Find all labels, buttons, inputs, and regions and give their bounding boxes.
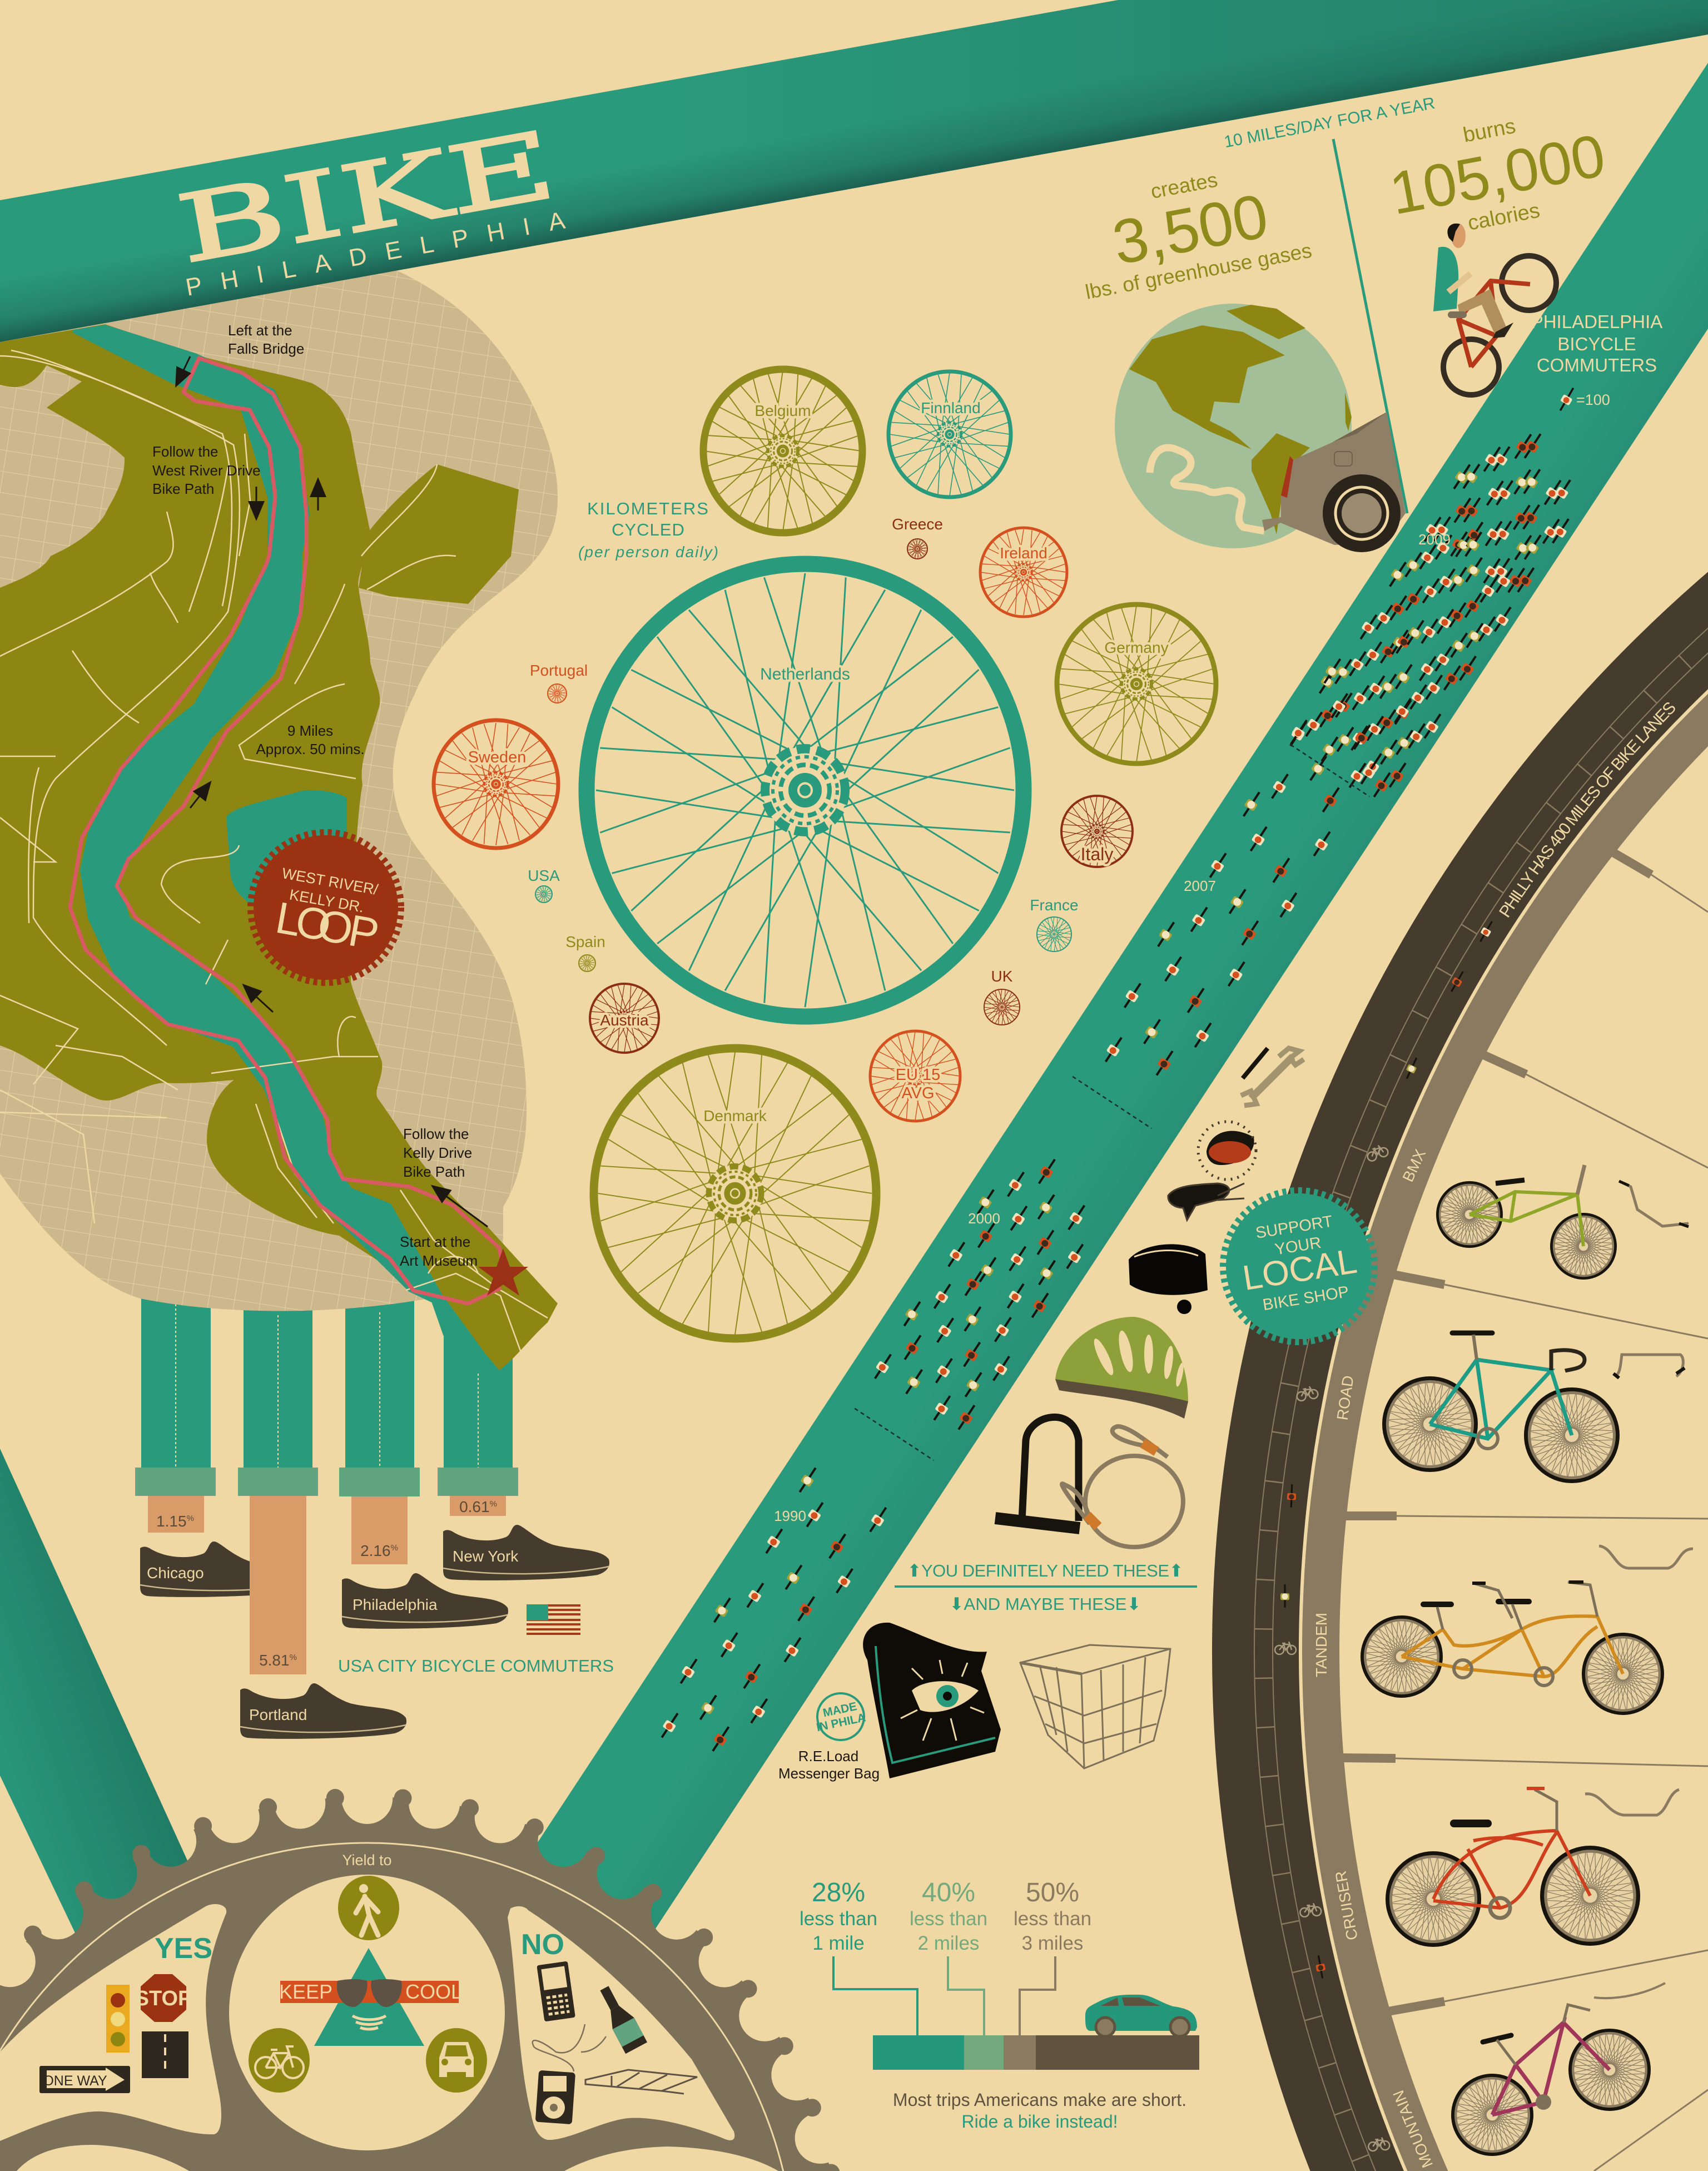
route arrows — [177, 356, 488, 1227]
stat: 50 percent: 3 miles — [1022, 1932, 1083, 1954]
bar chart: USA city bicycle commuters (legs) — [135, 1290, 614, 1739]
heading: kilometers cycled — [578, 499, 719, 561]
shoe: Chicago — [140, 1541, 306, 1597]
map directions text — [152, 322, 478, 1269]
icon: wheelie cyclist — [1433, 224, 1556, 395]
icon: earth — [1115, 304, 1352, 548]
icon: bicycle — [249, 2028, 310, 2093]
wheel: Italy: Italy — [1081, 844, 1113, 864]
label: yes: YES — [155, 1932, 212, 1965]
heading: kilometers cycled: KILOMETERS — [587, 499, 709, 518]
icon: made in Phila stamp: IN PHILA — [815, 1711, 867, 1734]
shoe: Portland: Portland — [249, 1706, 307, 1723]
wheel: Ireland: Ireland — [1000, 544, 1047, 562]
stat: 28 percent: 28% — [812, 1878, 865, 1907]
heading: Philadelphia bicycle commuters: PHILADELPHIA — [1531, 311, 1662, 332]
wheel: Denmark — [584, 1038, 886, 1349]
icon: U-lock — [995, 1417, 1080, 1528]
icon: one way sign: ONE WAY — [43, 2073, 107, 2089]
caption: most trips are short — [893, 2090, 1186, 2132]
wheel: France — [1030, 896, 1079, 953]
map park areas — [0, 324, 558, 1370]
gear cutouts: bottom — [17, 2145, 778, 2171]
panel: kilometers cycled wheels — [428, 362, 1223, 1349]
icon: USA flag — [527, 1604, 580, 1635]
year labels: 2000 — [968, 1210, 1000, 1227]
map directions text: Bike Path — [403, 1163, 465, 1180]
heading: kilometers cycled: CYCLED — [612, 520, 685, 539]
map directions text: West River Drive — [152, 462, 261, 479]
bike: BMX — [1426, 1165, 1689, 1290]
wheel: UK: UK — [991, 968, 1013, 985]
gear cutout: yes — [0, 1904, 226, 2141]
icon: triangle — [314, 1948, 424, 2046]
badge: West River Kelly Dr Loop: KELLY DR. — [288, 886, 365, 916]
caption: R.E.Load Messenger Bag: R.E.Load — [798, 1748, 858, 1764]
leg: Philadelphia: % — [391, 1543, 398, 1553]
bike type labels on rim — [1313, 1147, 1436, 2170]
map directions text: Bike Path — [152, 480, 214, 497]
wheel spokes — [1342, 851, 1708, 2171]
map directions text: Start at the — [400, 1233, 470, 1250]
icon: wrench and chain tool — [1241, 1048, 1304, 1106]
bike: mountain — [1439, 1983, 1665, 2168]
wheel: Germany: Germany — [1104, 639, 1169, 656]
wheel: Portugal — [530, 662, 588, 704]
leg: Portland: 5.81 — [259, 1652, 290, 1669]
stat: 28 percent: less than — [800, 1908, 877, 1930]
icon: one way sign — [39, 2066, 130, 2093]
leg: New York: % — [490, 1499, 497, 1509]
icon: basket — [1020, 1645, 1170, 1768]
seat stay bar — [0, 1449, 211, 1985]
river — [74, 326, 495, 1370]
wheel rim — [1321, 337, 1708, 2171]
icon: helmet — [1055, 1317, 1188, 1419]
bike type labels on rim: BMX — [1399, 1147, 1429, 1184]
divider line — [1333, 139, 1407, 513]
wheel: EU 15 average — [866, 1027, 964, 1125]
gear cutout: no — [508, 1906, 734, 2140]
caption: R.E.Load Messenger Bag: Messenger Bag — [778, 1765, 880, 1782]
map directions text: Art Museum — [400, 1252, 478, 1269]
icon: made in Phila stamp: MADE — [822, 1700, 858, 1719]
icon: earphones and music player — [533, 2024, 606, 2124]
year labels: 2007 — [1184, 878, 1216, 894]
stat: calories: calories — [1466, 199, 1542, 235]
wheel: France: France — [1030, 896, 1079, 914]
wheel: Greece: Greece — [892, 516, 943, 533]
heading: kilometers cycled: (per person daily) — [578, 543, 719, 561]
large wheel tire — [1255, 272, 1708, 2171]
heading: USA city bicycle commuters: USA CITY BICYCLE COMMUTERS — [338, 1656, 614, 1676]
badge: West River Kelly Dr Loop: WEST RIVER/ — [281, 865, 380, 898]
wheel: Ireland — [976, 525, 1071, 619]
stat: 50 percent: 50% — [1026, 1878, 1079, 1907]
map directions text: Follow the — [152, 443, 218, 460]
keep cool medallion — [229, 1875, 505, 2150]
leg: New York: 0.61 — [459, 1498, 490, 1515]
cyclists 2000 — [865, 1137, 1118, 1439]
gear body — [0, 1797, 841, 2171]
stat: 50 percent — [1014, 1878, 1091, 1954]
stat: 40 percent — [910, 1878, 987, 1954]
reservoir — [226, 790, 347, 912]
icon: smile — [352, 2016, 386, 2029]
banner: keep cool: KEEP — [279, 1980, 332, 2003]
icon: car — [426, 2028, 487, 2093]
wheel: Netherlands: Netherlands — [760, 665, 850, 683]
cyclists 1990 — [641, 1460, 895, 1777]
connector lines — [833, 1956, 1055, 2035]
year labels — [774, 531, 1451, 1524]
wheel: Finnland: Finnland — [921, 399, 981, 417]
leg: Chicago — [135, 1290, 216, 1533]
wheel: Sweden — [428, 716, 564, 852]
legend: one cyclist equals 100 — [1556, 385, 1610, 413]
title: BIKE: BIKE — [170, 112, 563, 284]
stat: 28 percent — [800, 1878, 877, 1954]
icon: made in Phila stamp — [815, 1693, 867, 1740]
leg: New York — [438, 1290, 518, 1516]
heading: Philadelphia bicycle commuters — [1531, 311, 1662, 375]
icon: start star — [478, 1248, 528, 1296]
bike: road — [1368, 1333, 1685, 1498]
banner: keep cool — [279, 1980, 462, 2003]
commuter pictogram: bar of cyclists — [636, 407, 1604, 1790]
bike type labels on rim: MOUNTAIN — [1389, 2088, 1436, 2170]
shoe: Portland — [240, 1683, 406, 1739]
bike: cruiser — [1371, 1788, 1679, 1961]
wheel: USA — [528, 867, 560, 904]
wheel: Belgium — [696, 362, 870, 540]
stat: 40 percent: 40% — [922, 1878, 975, 1907]
wheel: Belgium: Belgium — [754, 402, 811, 419]
wheel: Spain — [565, 933, 605, 973]
map directions text: Falls Bridge — [228, 340, 304, 357]
badge: West River Kelly Dr Loop: LOOP — [272, 893, 383, 959]
shoe: Philadelphia — [342, 1573, 508, 1629]
icon: sunglasses — [337, 1979, 402, 2007]
heading: Philadelphia bicycle commuters: BICYCLE — [1557, 334, 1636, 354]
icon: traffic light — [106, 1985, 130, 2053]
wheel: Austria — [587, 980, 662, 1056]
caption: 10 miles/day for a year: 10 MILES/DAY FOR A YEAR — [1223, 94, 1437, 151]
stat: 28 percent: 1 mile — [812, 1932, 865, 1954]
badge: support your local bike shop: LOCAL — [1240, 1242, 1359, 1298]
caption: most trips are short: Most trips Americans make are short. — [893, 2090, 1186, 2110]
subtitle: Philadelphia: PHILADELPHIA — [183, 207, 568, 301]
heading: you definitely need these: ⬆YOU DEFINITELY NEED THESE⬆ — [907, 1561, 1183, 1580]
bike type labels on rim: CRUISER — [1332, 1870, 1361, 1941]
lane cyclists and bike icons — [1275, 919, 1496, 2152]
map left neighbourhood — [0, 365, 125, 588]
year labels: 1990 — [774, 1508, 806, 1524]
wheel: EU 15 average: EU 15 — [896, 1066, 940, 1084]
text: Philly has 400 miles of bike lanes — [1508, 708, 1677, 919]
gear inner arc line — [0, 1843, 795, 2171]
wheel: UK — [982, 968, 1021, 1027]
stat: calories: burns — [1461, 115, 1517, 147]
legend: one cyclist equals 100: =100 — [1576, 391, 1610, 408]
map upper right park — [359, 464, 519, 604]
badge: support your local bike shop: YOUR — [1274, 1234, 1322, 1258]
stat: 40 percent: less than — [910, 1908, 987, 1930]
badge: support your local bike shop: BIKE SHOP — [1262, 1283, 1350, 1314]
leg: Portland — [238, 1290, 318, 1674]
icon: car exhaust — [1262, 412, 1406, 552]
icon: sidewalk — [585, 2070, 697, 2094]
cyclists 2007 — [1080, 651, 1424, 1102]
icon: cell phone — [537, 1961, 575, 2021]
map panel: West River / Kelly Drive loop — [0, 267, 558, 1370]
wheel: USA: USA — [528, 867, 560, 884]
icon: road — [142, 2031, 188, 2078]
map roads — [0, 350, 548, 1357]
banner: keep cool: COOL — [405, 1980, 462, 2003]
wheel: Denmark: Denmark — [703, 1107, 767, 1124]
bike type labels on rim: ROAD — [1334, 1374, 1357, 1421]
map land area — [0, 267, 558, 1311]
icon: cable lock — [1062, 1426, 1183, 1547]
leg: Chicago: 1.15 — [156, 1513, 187, 1530]
chainring gear — [0, 1797, 841, 2171]
leg: Chicago: % — [187, 1514, 194, 1523]
panel: 10 miles a day for a year — [1084, 94, 1610, 552]
map directions text: Approx. 50 mins. — [256, 741, 365, 757]
map directions text: 9 Miles — [287, 722, 333, 739]
label: no: NO — [521, 1929, 564, 1961]
icon: bottle — [594, 1982, 647, 2054]
badge: support your local bike shop — [1224, 1192, 1373, 1341]
stat: greenhouse gases: 3,500 — [1108, 181, 1273, 277]
icon: bike light — [1198, 1122, 1256, 1179]
leg: Philadelphia: 2.16 — [360, 1542, 391, 1559]
badge: West River Kelly Dr Loop — [252, 834, 400, 982]
stat: greenhouse gases: creates — [1149, 168, 1219, 203]
wheel: Italy — [1058, 792, 1136, 870]
stat: greenhouse gases — [1084, 168, 1314, 304]
panel: gear you need — [778, 1048, 1304, 1782]
panel: short trips chart — [800, 1878, 1199, 2132]
shoe: Chicago: Chicago — [147, 1564, 204, 1582]
stat: 50 percent: less than — [1014, 1908, 1091, 1930]
shoe: Philadelphia: Philadelphia — [352, 1596, 438, 1613]
heading: and maybe these: ⬇AND MAYBE THESE⬇ — [950, 1594, 1141, 1614]
wheel: Netherlands — [574, 551, 1036, 1030]
wheel: Germany — [1050, 597, 1223, 771]
wheel: Greece — [892, 516, 943, 560]
wheel: Portugal: Portugal — [530, 662, 588, 679]
caption: R.E.Load Messenger Bag — [778, 1748, 880, 1782]
wheel: Spain: Spain — [565, 933, 605, 950]
icon: pedestrian — [338, 1876, 399, 1940]
bike type labels on rim: TANDEM — [1313, 1613, 1330, 1677]
map directions text: Left at the — [228, 322, 292, 339]
icon: messenger bag — [863, 1623, 1001, 1778]
map directions text: Kelly Drive — [403, 1144, 472, 1161]
leg: Portland: % — [290, 1653, 297, 1662]
wheel: EU 15 average: AVG — [901, 1084, 935, 1102]
top tube bar — [0, 0, 1708, 342]
text: yield to: Yield to — [342, 1852, 392, 1868]
icon: saddle — [1168, 1183, 1244, 1220]
cyclists 2009 — [1281, 408, 1604, 810]
rim caption on arc: PHILLY HAS 400 MILES OF BIKE LANES — [1499, 702, 1675, 918]
icon: stop sign — [135, 1974, 192, 2022]
bike: tandem — [1348, 1546, 1693, 1727]
bike route loop — [70, 358, 503, 1303]
wheel: Sweden: Sweden — [468, 749, 526, 766]
icon: tire tube and pump — [1129, 1244, 1208, 1314]
stat: calories: 105,000 — [1384, 121, 1610, 227]
shoe: New York — [443, 1525, 609, 1580]
wheel: Austria: Austria — [600, 1012, 649, 1029]
top tube shading — [0, 0, 1708, 342]
year labels: 2009 — [1418, 531, 1451, 548]
wheel: Finnland — [883, 366, 1016, 503]
shoe: New York: New York — [453, 1548, 519, 1565]
leg: Philadelphia — [339, 1290, 420, 1564]
stat: greenhouse gases: lbs. of greenhouse gases — [1084, 239, 1314, 304]
heading: Philadelphia bicycle commuters: COMMUTERS — [1537, 355, 1657, 375]
down tube bar — [469, 63, 1708, 1946]
map directions text: Follow the — [403, 1126, 469, 1142]
badge: support your local bike shop: SUPPORT — [1254, 1212, 1334, 1242]
caption: most trips are short: Ride a bike instead! — [961, 2111, 1118, 2132]
icon: stop sign: STOP — [135, 1987, 192, 2010]
stat: 40 percent: 2 miles — [918, 1932, 979, 1954]
icon: teal car — [1085, 1995, 1197, 2036]
stacked bar — [873, 2035, 1199, 2070]
